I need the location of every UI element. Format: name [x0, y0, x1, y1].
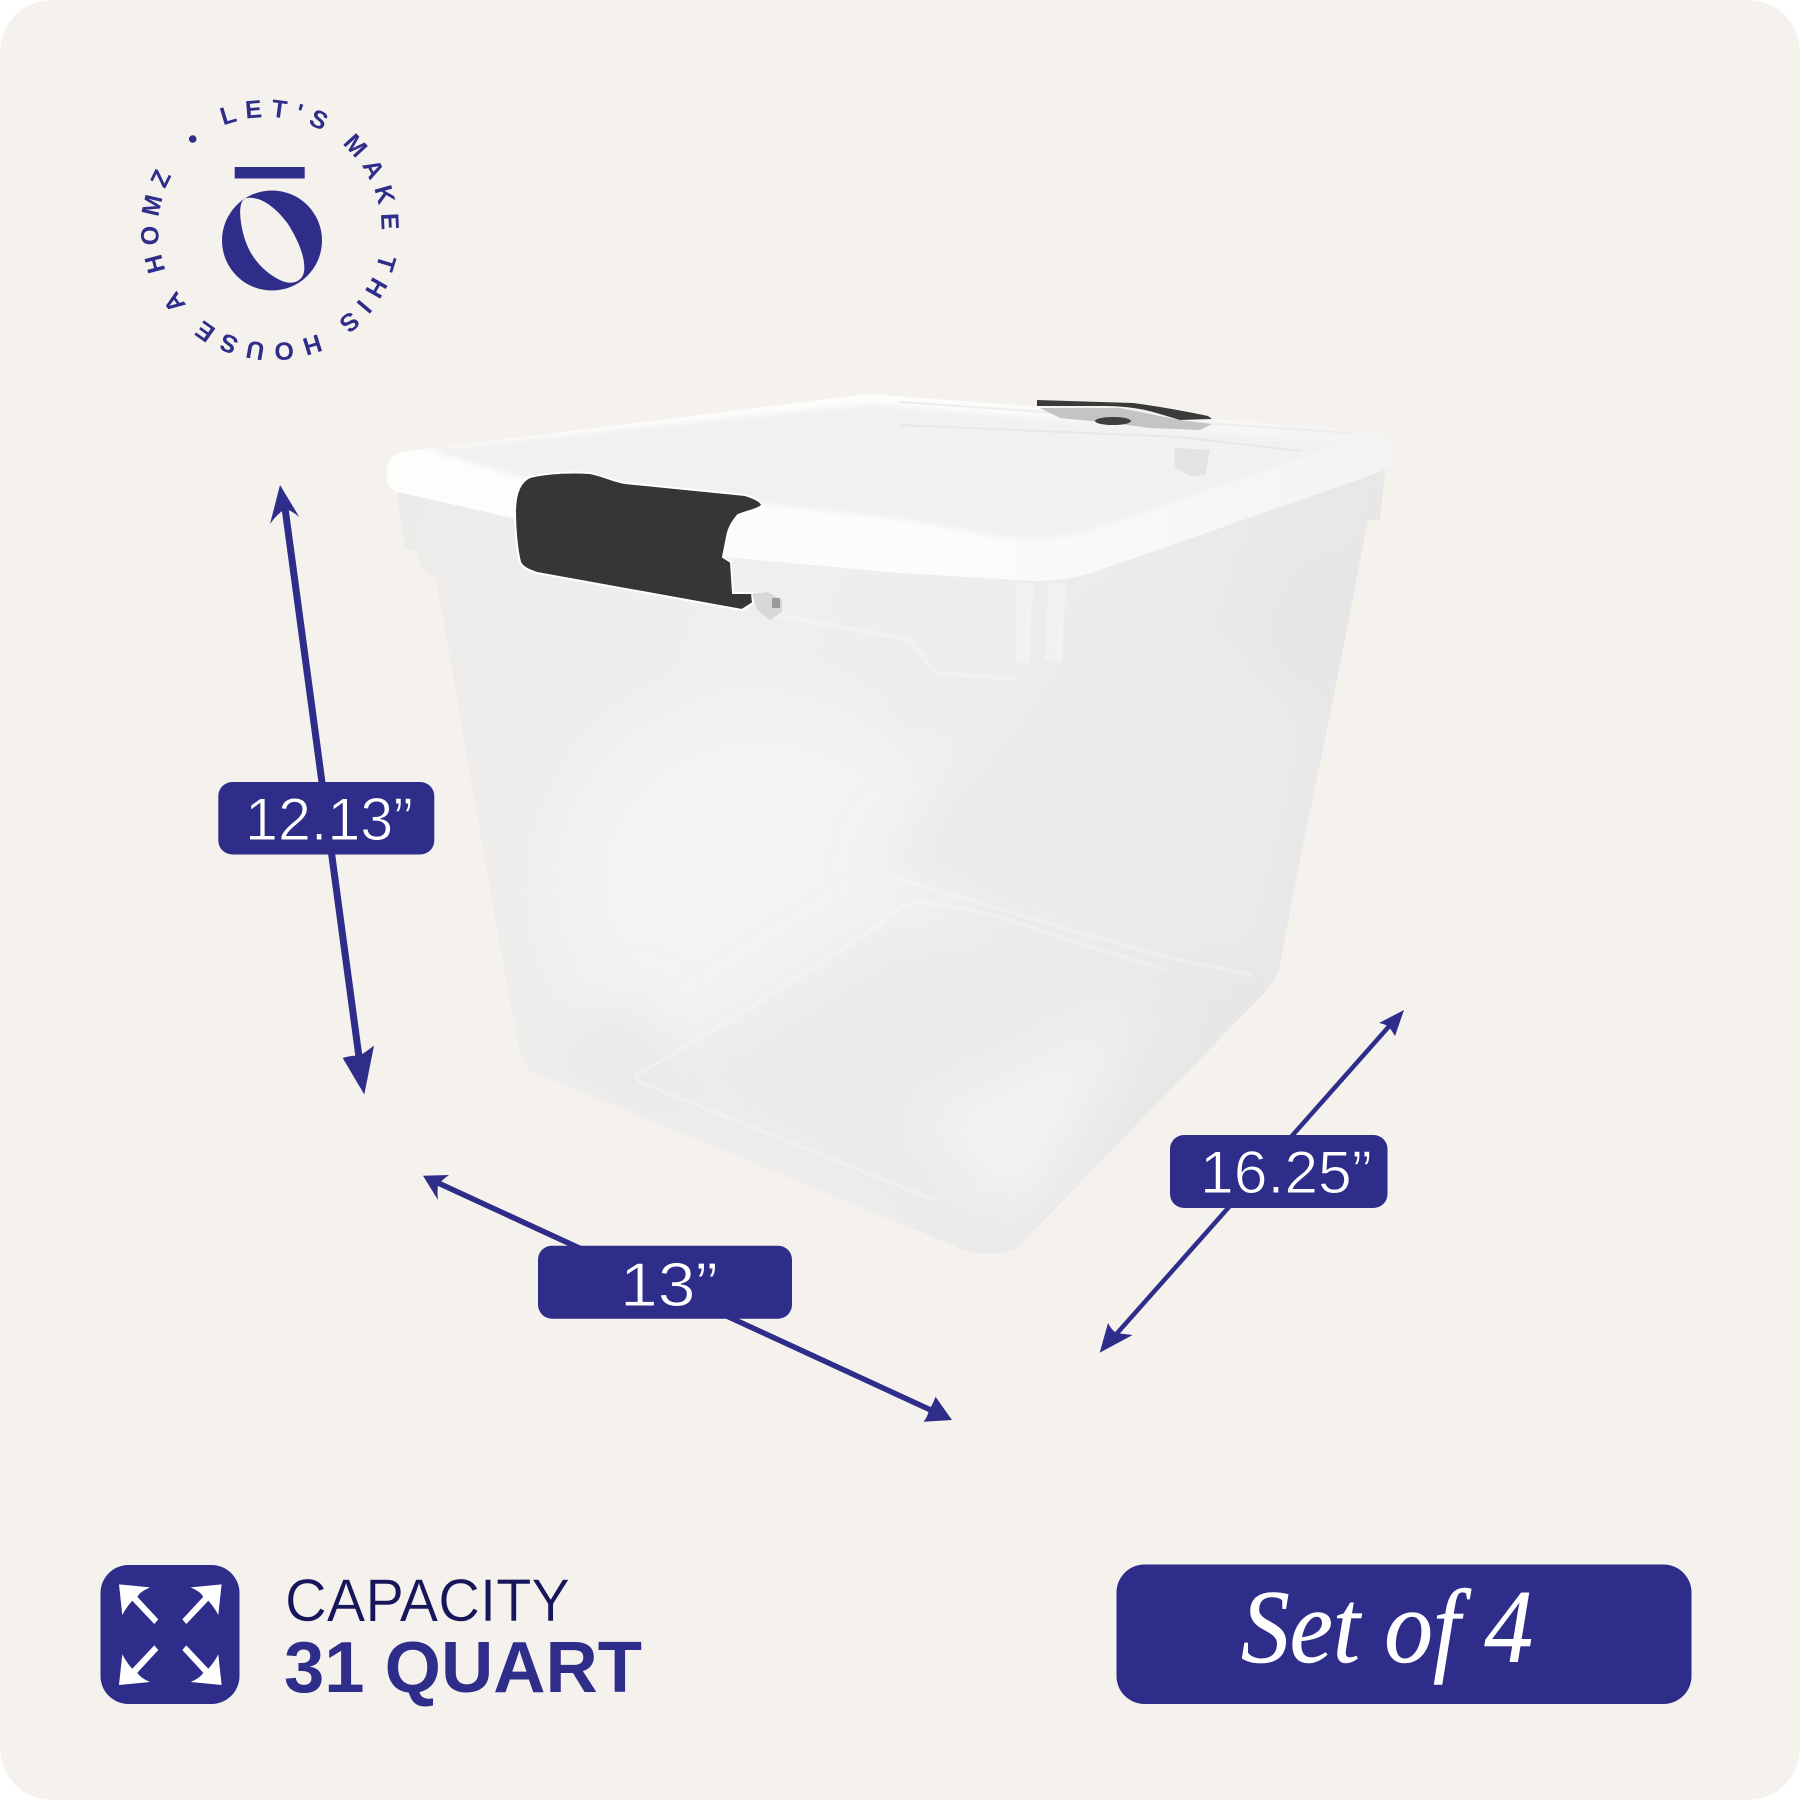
depth label: 16.25”	[1200, 1139, 1372, 1206]
capacity caption: CAPACITY	[285, 1567, 570, 1634]
width arrow	[423, 1175, 952, 1422]
height label: 12.13”	[245, 786, 413, 853]
set of 4 badge: Set of 4	[1241, 1568, 1533, 1685]
depth dimension: arrow and label	[1100, 1010, 1404, 1353]
width label	[538, 1246, 792, 1320]
depth arrow	[1100, 1010, 1404, 1353]
rear latch	[1037, 400, 1212, 476]
width dimension: arrow and label	[423, 1175, 952, 1422]
logo macron bar	[235, 167, 305, 178]
lid centre panel	[425, 404, 1342, 538]
box body	[397, 440, 1390, 1254]
front latch handle	[515, 472, 782, 620]
height arrow	[270, 485, 374, 1094]
width label: 13”	[620, 1251, 718, 1320]
logo o mark	[222, 190, 322, 290]
height dimension: arrow and label	[218, 485, 434, 1094]
box lid	[387, 394, 1395, 581]
icon: expand arrows	[100, 1565, 240, 1704]
capacity block	[100, 1565, 642, 1708]
logo separator dot	[189, 135, 196, 143]
logo badge	[141, 100, 399, 360]
set of 4 badge	[1116, 1564, 1692, 1704]
box ledge and ribs	[775, 583, 1064, 679]
product: clear storage box	[387, 394, 1395, 1254]
tray floor outline	[636, 877, 1253, 1200]
capacity value: 31 QUART	[284, 1628, 642, 1708]
circular slogan text: LET'S MAKE THIS HOUSE A HOMZ	[141, 100, 399, 360]
